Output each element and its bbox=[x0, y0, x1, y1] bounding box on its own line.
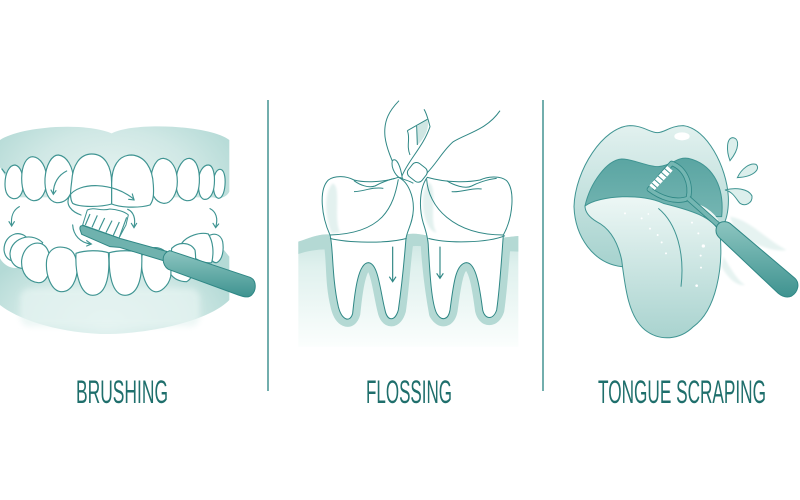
mouth cavity bbox=[585, 158, 722, 217]
tongue bbox=[585, 197, 721, 338]
icon: tongue scraper bbox=[649, 163, 798, 297]
label: flossing: FLOSSING bbox=[366, 374, 452, 410]
panel: tongue scraping bbox=[574, 126, 798, 338]
lip highlight bbox=[674, 132, 690, 140]
right molar bbox=[420, 177, 512, 319]
panel: brushing bbox=[0, 126, 255, 334]
divider bbox=[542, 100, 544, 391]
lower teeth bbox=[4, 233, 223, 295]
handle bbox=[716, 222, 798, 297]
arrows bbox=[389, 247, 443, 282]
gum band under gum line bbox=[298, 234, 518, 254]
upper teeth bbox=[2, 154, 225, 207]
head and neck bbox=[80, 226, 167, 261]
lower gums bbox=[0, 250, 229, 334]
left molar bbox=[322, 177, 413, 319]
gum shadow around roots bbox=[331, 240, 503, 319]
hand and floss bbox=[385, 101, 500, 184]
icon: toothbrush bbox=[80, 209, 255, 297]
motion arrows bbox=[9, 171, 219, 246]
bristles with toothpaste bbox=[83, 209, 128, 238]
lower gum highlight bbox=[20, 288, 200, 327]
splash bbox=[722, 217, 787, 285]
label: brushing: BRUSHING bbox=[76, 374, 168, 410]
icon: droplets bbox=[725, 138, 758, 205]
divider bbox=[267, 100, 269, 391]
upper gums bbox=[0, 126, 229, 198]
gums bbox=[298, 234, 518, 347]
panel: flossing bbox=[298, 101, 518, 347]
lips bbox=[574, 126, 728, 267]
handle bbox=[163, 251, 255, 297]
